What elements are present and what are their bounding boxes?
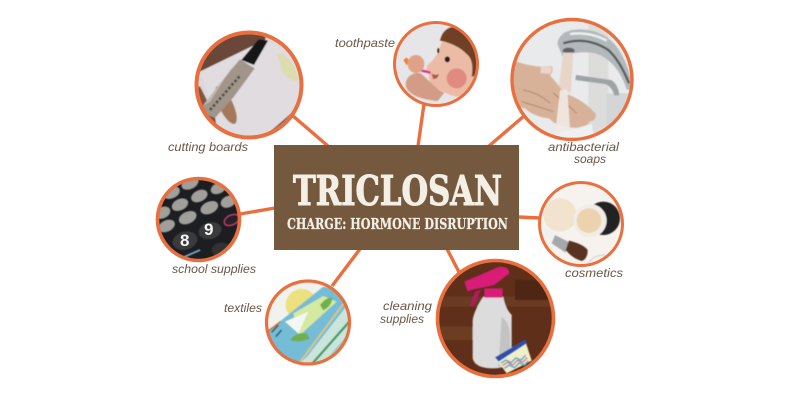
photo: patterned fabric bbox=[268, 282, 348, 362]
box background bbox=[274, 145, 519, 250]
ring bbox=[540, 182, 622, 266]
label: school supplies: school supplies bbox=[172, 262, 256, 276]
label: textiles: textiles bbox=[224, 301, 262, 315]
panel: textiles bbox=[224, 279, 352, 366]
connector lines bbox=[240, 104, 540, 286]
label: cleaning: cleaning bbox=[383, 299, 432, 313]
photo: powder and brush bbox=[541, 184, 621, 264]
subtitle: CHARGE: HORMONE DISRUPTION bbox=[287, 215, 508, 233]
photo: calculator keys bbox=[159, 180, 238, 259]
panel: cleaning supplies bbox=[380, 256, 558, 381]
panel: toothpaste bbox=[335, 20, 482, 112]
photo: spray bottle and sponge bbox=[439, 262, 552, 375]
photo: hands under faucet bbox=[514, 21, 630, 138]
panel: antibacterial soaps bbox=[508, 15, 636, 166]
photo: knife on cutting board bbox=[198, 34, 300, 136]
key numbers: 9 bbox=[204, 220, 213, 239]
central title box bbox=[274, 145, 519, 250]
label: cosmetics: cosmetics bbox=[565, 266, 623, 280]
label: cutting boards: cutting boards bbox=[168, 140, 248, 154]
photo: toddler brushing teeth bbox=[396, 24, 476, 104]
panel: school supplies bbox=[153, 174, 256, 276]
key numbers: 8 bbox=[180, 231, 189, 250]
label: soaps: soaps bbox=[574, 152, 606, 166]
ring bbox=[512, 20, 632, 140]
title: TRICLOSAN bbox=[293, 167, 502, 215]
panel: cutting boards bbox=[168, 28, 308, 154]
ring bbox=[158, 178, 240, 260]
label: toothpaste: toothpaste bbox=[335, 36, 395, 50]
ring bbox=[266, 281, 350, 364]
ring bbox=[196, 32, 302, 138]
label: supplies: supplies bbox=[380, 312, 424, 326]
panel: cosmetics bbox=[538, 181, 624, 277]
key numbers bbox=[180, 224, 213, 246]
ring bbox=[438, 260, 554, 376]
label: antibacterial: antibacterial bbox=[548, 140, 619, 154]
ring bbox=[394, 22, 478, 106]
